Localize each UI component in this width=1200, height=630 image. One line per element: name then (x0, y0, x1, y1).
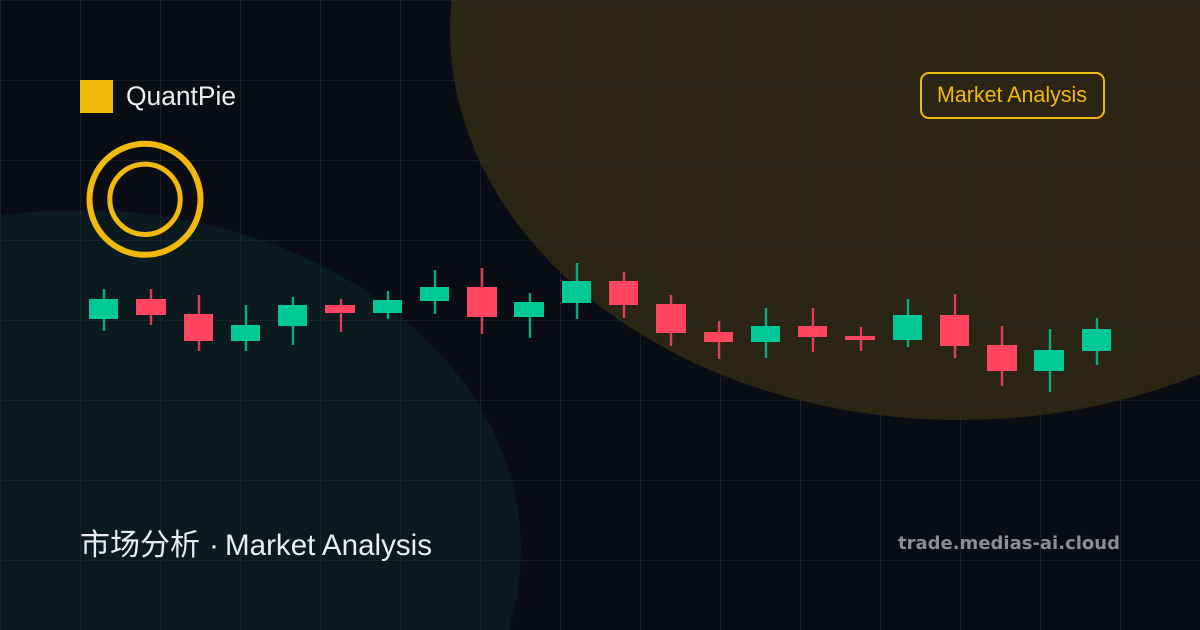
candle 15 (751, 308, 780, 358)
candle 9 (467, 268, 497, 334)
candle 11 (562, 263, 591, 319)
badge: Market Analysis (921, 73, 1104, 118)
gold background ellipse (450, 0, 1200, 420)
title (80, 529, 432, 562)
icon: logo square (80, 80, 113, 113)
badge: Market Analysis: Market Analysis (937, 82, 1087, 107)
candle 8 (420, 270, 449, 314)
candle 16 (798, 308, 827, 352)
candle 10 (514, 293, 544, 338)
candle 6 (325, 299, 355, 332)
title: · (209, 529, 219, 562)
candle 14 (704, 321, 733, 359)
icon: concentric rings (90, 144, 200, 255)
candle 3 (184, 295, 213, 351)
brand logo (80, 80, 236, 113)
candle 12 (609, 272, 638, 318)
candle 18 (893, 299, 922, 347)
candle 7 (373, 291, 402, 319)
candle 2 (136, 289, 166, 325)
candle 21 (1034, 329, 1064, 392)
teal background ellipse (0, 210, 521, 630)
candlestick chart (89, 263, 1111, 392)
candle 19 (940, 294, 969, 358)
candle 13 (656, 295, 686, 346)
candle 1 (89, 289, 118, 331)
candle 5 (278, 297, 307, 345)
candle 4 (231, 305, 260, 351)
candle 17 (845, 327, 875, 351)
brand name: QuantPie (126, 81, 236, 111)
website url: trade.medias-ai.cloud (898, 533, 1120, 554)
title: Market Analysis (225, 529, 432, 562)
title: 市场分析 (80, 529, 200, 562)
candle 22 (1082, 318, 1111, 365)
candle 20 (987, 326, 1017, 386)
